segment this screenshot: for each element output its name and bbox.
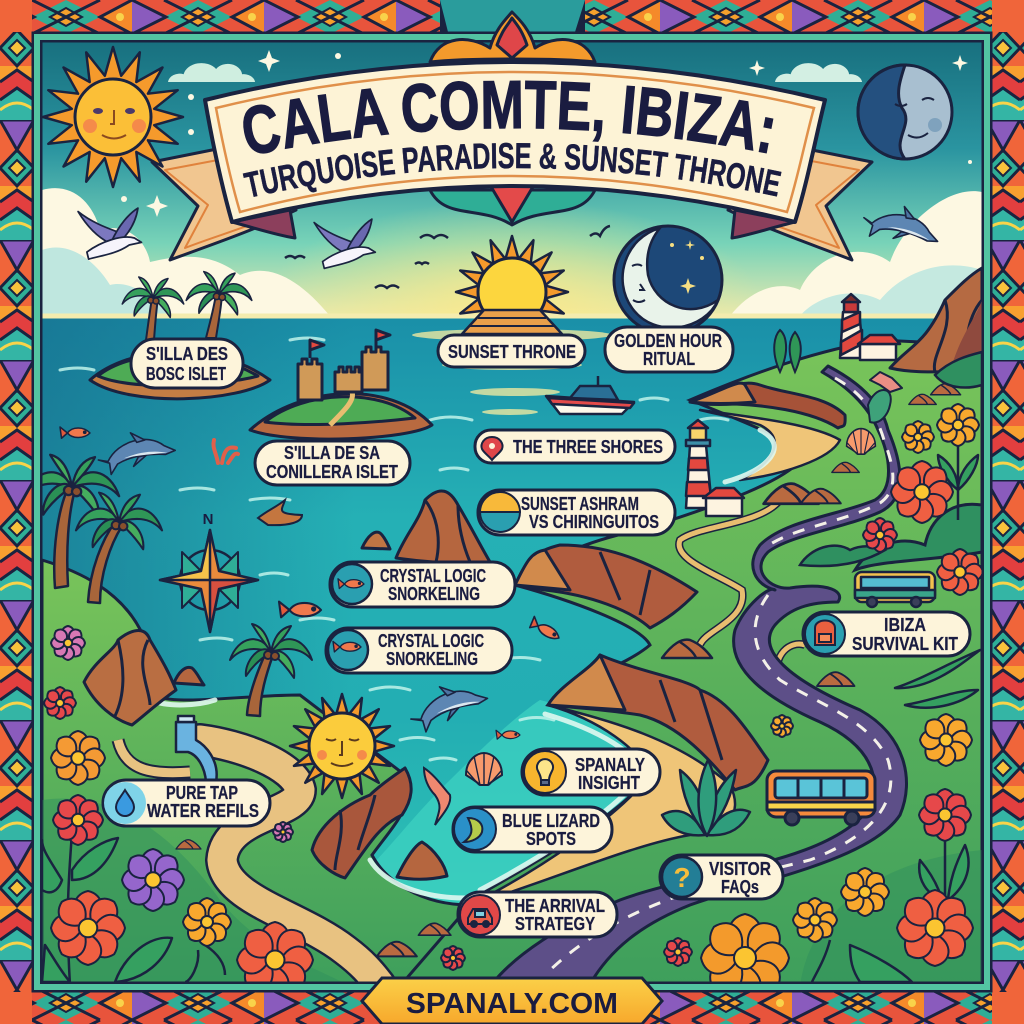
icon: driftwood [258,500,302,525]
icon: fish [60,427,90,438]
icon: lizard in water [424,768,450,825]
label: Blue Lizard Spots [453,807,612,852]
leaves right [812,440,980,982]
icon: setting sun [456,236,568,348]
label: Crystal Logic Snorkeling (upper): CRYSTAL LOGIC [380,566,486,586]
icon: coral [213,440,238,463]
icon: small dolphin left [98,433,175,474]
icon: moon with face [858,65,952,159]
icon: blue lizard [454,808,496,850]
icon: water tap [176,716,217,800]
right land mass [340,340,982,986]
label: Sunset Ashram vs Chiringuitos: SUNSET ASHRAM [521,494,639,514]
title banner [150,60,874,262]
sea rock spire [362,491,490,563]
icon: reef fish [328,630,368,670]
label: Crystal Logic Snorkeling (lower): SNORKELING [386,649,478,669]
label: Golden Hour Ritual [605,327,733,372]
icon: sun with face [43,47,183,187]
icon: small fish shapes [496,616,562,739]
footer badge: SPANALY.COM: SPANALY.COM [406,988,618,1020]
icon: question mark: ? [673,862,691,893]
label: Crystal Logic Snorkeling (lower): CRYSTAL LOGIC [378,631,484,651]
icon: backpack [805,614,845,654]
label: Crystal Logic Snorkeling (upper) [330,562,515,607]
icon: dolphin in sky [858,193,945,263]
label: S'Illa des Bosc Islet [131,339,243,388]
label: Ibiza Survival Kit: IBIZA [884,615,926,635]
label: Spanaly Insight: SPANALY [575,755,645,775]
icon: top lighthouse with house [840,294,900,360]
palm tree centre [230,624,312,716]
label: S'Illa de Sa Conillera Islet [255,441,410,485]
clouds [42,63,982,316]
label: Sunset Ashram vs Chiringuitos: VS CHIRINGUITOS [529,512,659,532]
sea [42,316,982,986]
icon: agave plant [662,760,750,836]
icon: compass rose [160,511,258,632]
footer badge: SPANALY.COM [362,978,662,1024]
icon: crescent moon [614,226,722,334]
icon: water drop [104,782,146,824]
mountain cliff top right [890,268,982,372]
subtitle: TURQUOISE PARADISE & SUNSET THRONE [242,142,782,197]
label: Pure Tap Water Refils: WATER REFILS [147,801,259,821]
label: The Three Shores: THE THREE SHORES [513,437,663,457]
icon: left lighthouse with house [686,420,744,516]
left ribbon tail [152,148,296,260]
label: Blue Lizard Spots: BLUE LIZARD [502,811,600,831]
bright shallow lagoon [370,700,660,905]
icon: large bus [767,771,875,825]
palm tree left short [76,493,162,603]
label: Pure Tap Water Refils [103,780,270,826]
decorative lower ornament [430,185,595,225]
label: Golden Hour Ritual: RITUAL [643,349,695,369]
label: Visitor FAQs: FAQs [721,877,759,897]
palm tree left tall [25,455,119,588]
icon: boat [546,376,634,414]
land colour patches [42,798,982,986]
label: Ibiza Survival Kit [803,612,970,656]
icon: snorkel fish [332,564,372,604]
label: S'Illa de Sa Conillera Islet: S'ILLA DE SA [284,443,380,463]
central cliffs [515,545,768,790]
foam shorelines [150,430,774,898]
icon: cypress trees [774,330,801,372]
island: S'Illa de Sa Conillera with castle [250,330,432,439]
icon: seagull left [78,208,141,259]
label: Blue Lizard Spots: SPOTS [526,829,576,849]
icon: fish near compass [279,602,321,617]
icon: seagull right [314,219,375,268]
label: S'Illa de Sa Conillera Islet: CONILLERA ISLET [266,462,398,482]
label: The Arrival Strategy: THE ARRIVAL [505,896,605,916]
distant birds [285,226,610,288]
island: S'Illa des Bosc [90,272,270,399]
sun reflection on the water [412,329,612,415]
icon: dolphin centre [407,680,491,734]
label: S'Illa des Bosc Islet: BOSC ISLET [146,364,226,384]
label: Crystal Logic Snorkeling (lower) [326,628,512,673]
top ornament over frame and banner [430,12,595,62]
label: Ibiza Survival Kit: SURVIVAL KIT [852,634,958,654]
main title: CALA COMTE, IBIZA: [243,80,774,154]
sandy beaches [470,410,840,905]
label: Spanaly Insight: INSIGHT [578,773,640,793]
left land mass [42,560,470,986]
icon: scallop shell [466,753,502,785]
rocks on land [176,384,961,956]
icon: scallop shell right [847,429,875,454]
label: Visitor FAQs [660,855,783,899]
flowers left [44,626,313,998]
label: Golden Hour Ritual: GOLDEN HOUR [614,331,722,351]
dirt paths right [679,500,805,680]
icon: small bus [855,572,935,607]
label: The Arrival Strategy [458,892,617,937]
icon: location pin [481,437,503,460]
icon: bush mid [800,546,885,566]
label: Sunset Ashram vs Chiringuitos [478,490,675,535]
icon: bird and creature on road [868,372,902,423]
icon: bush right [855,504,982,570]
dirt path left [118,740,380,985]
label: Sunset Throne [438,335,585,367]
flowers right [441,404,983,1002]
label: Crystal Logic Snorkeling (upper): SNORKELING [388,584,480,604]
right ribbon tail [728,148,872,260]
leaves left [42,830,225,985]
sky [42,42,982,322]
label: S'Illa des Bosc Islet: S'ILLA DES [146,344,228,364]
road [492,366,907,984]
bottom centre cliff [312,768,447,879]
icon: car [460,895,500,935]
label: Spanaly Insight [522,749,660,795]
icon: light bulb [524,751,566,793]
label: Visitor FAQs: VISITOR [709,859,771,879]
sky sparkles [121,50,972,217]
label: Sunset Throne: SUNSET THRONE [448,342,576,362]
icon: compass rose: N [203,511,213,528]
label: Pure Tap Water Refils: PURE TAP [166,783,238,803]
left cliff [84,631,204,725]
water ripples [60,338,728,760]
label: The Arrival Strategy: STRATEGY [515,914,595,934]
cliff above beach [690,383,845,428]
icon: sunset over waves [480,492,520,532]
icon: sun with sleeping face [290,694,394,798]
banner body [205,62,825,222]
icon: bush top right [935,352,982,388]
label: The Three Shores [475,430,675,463]
